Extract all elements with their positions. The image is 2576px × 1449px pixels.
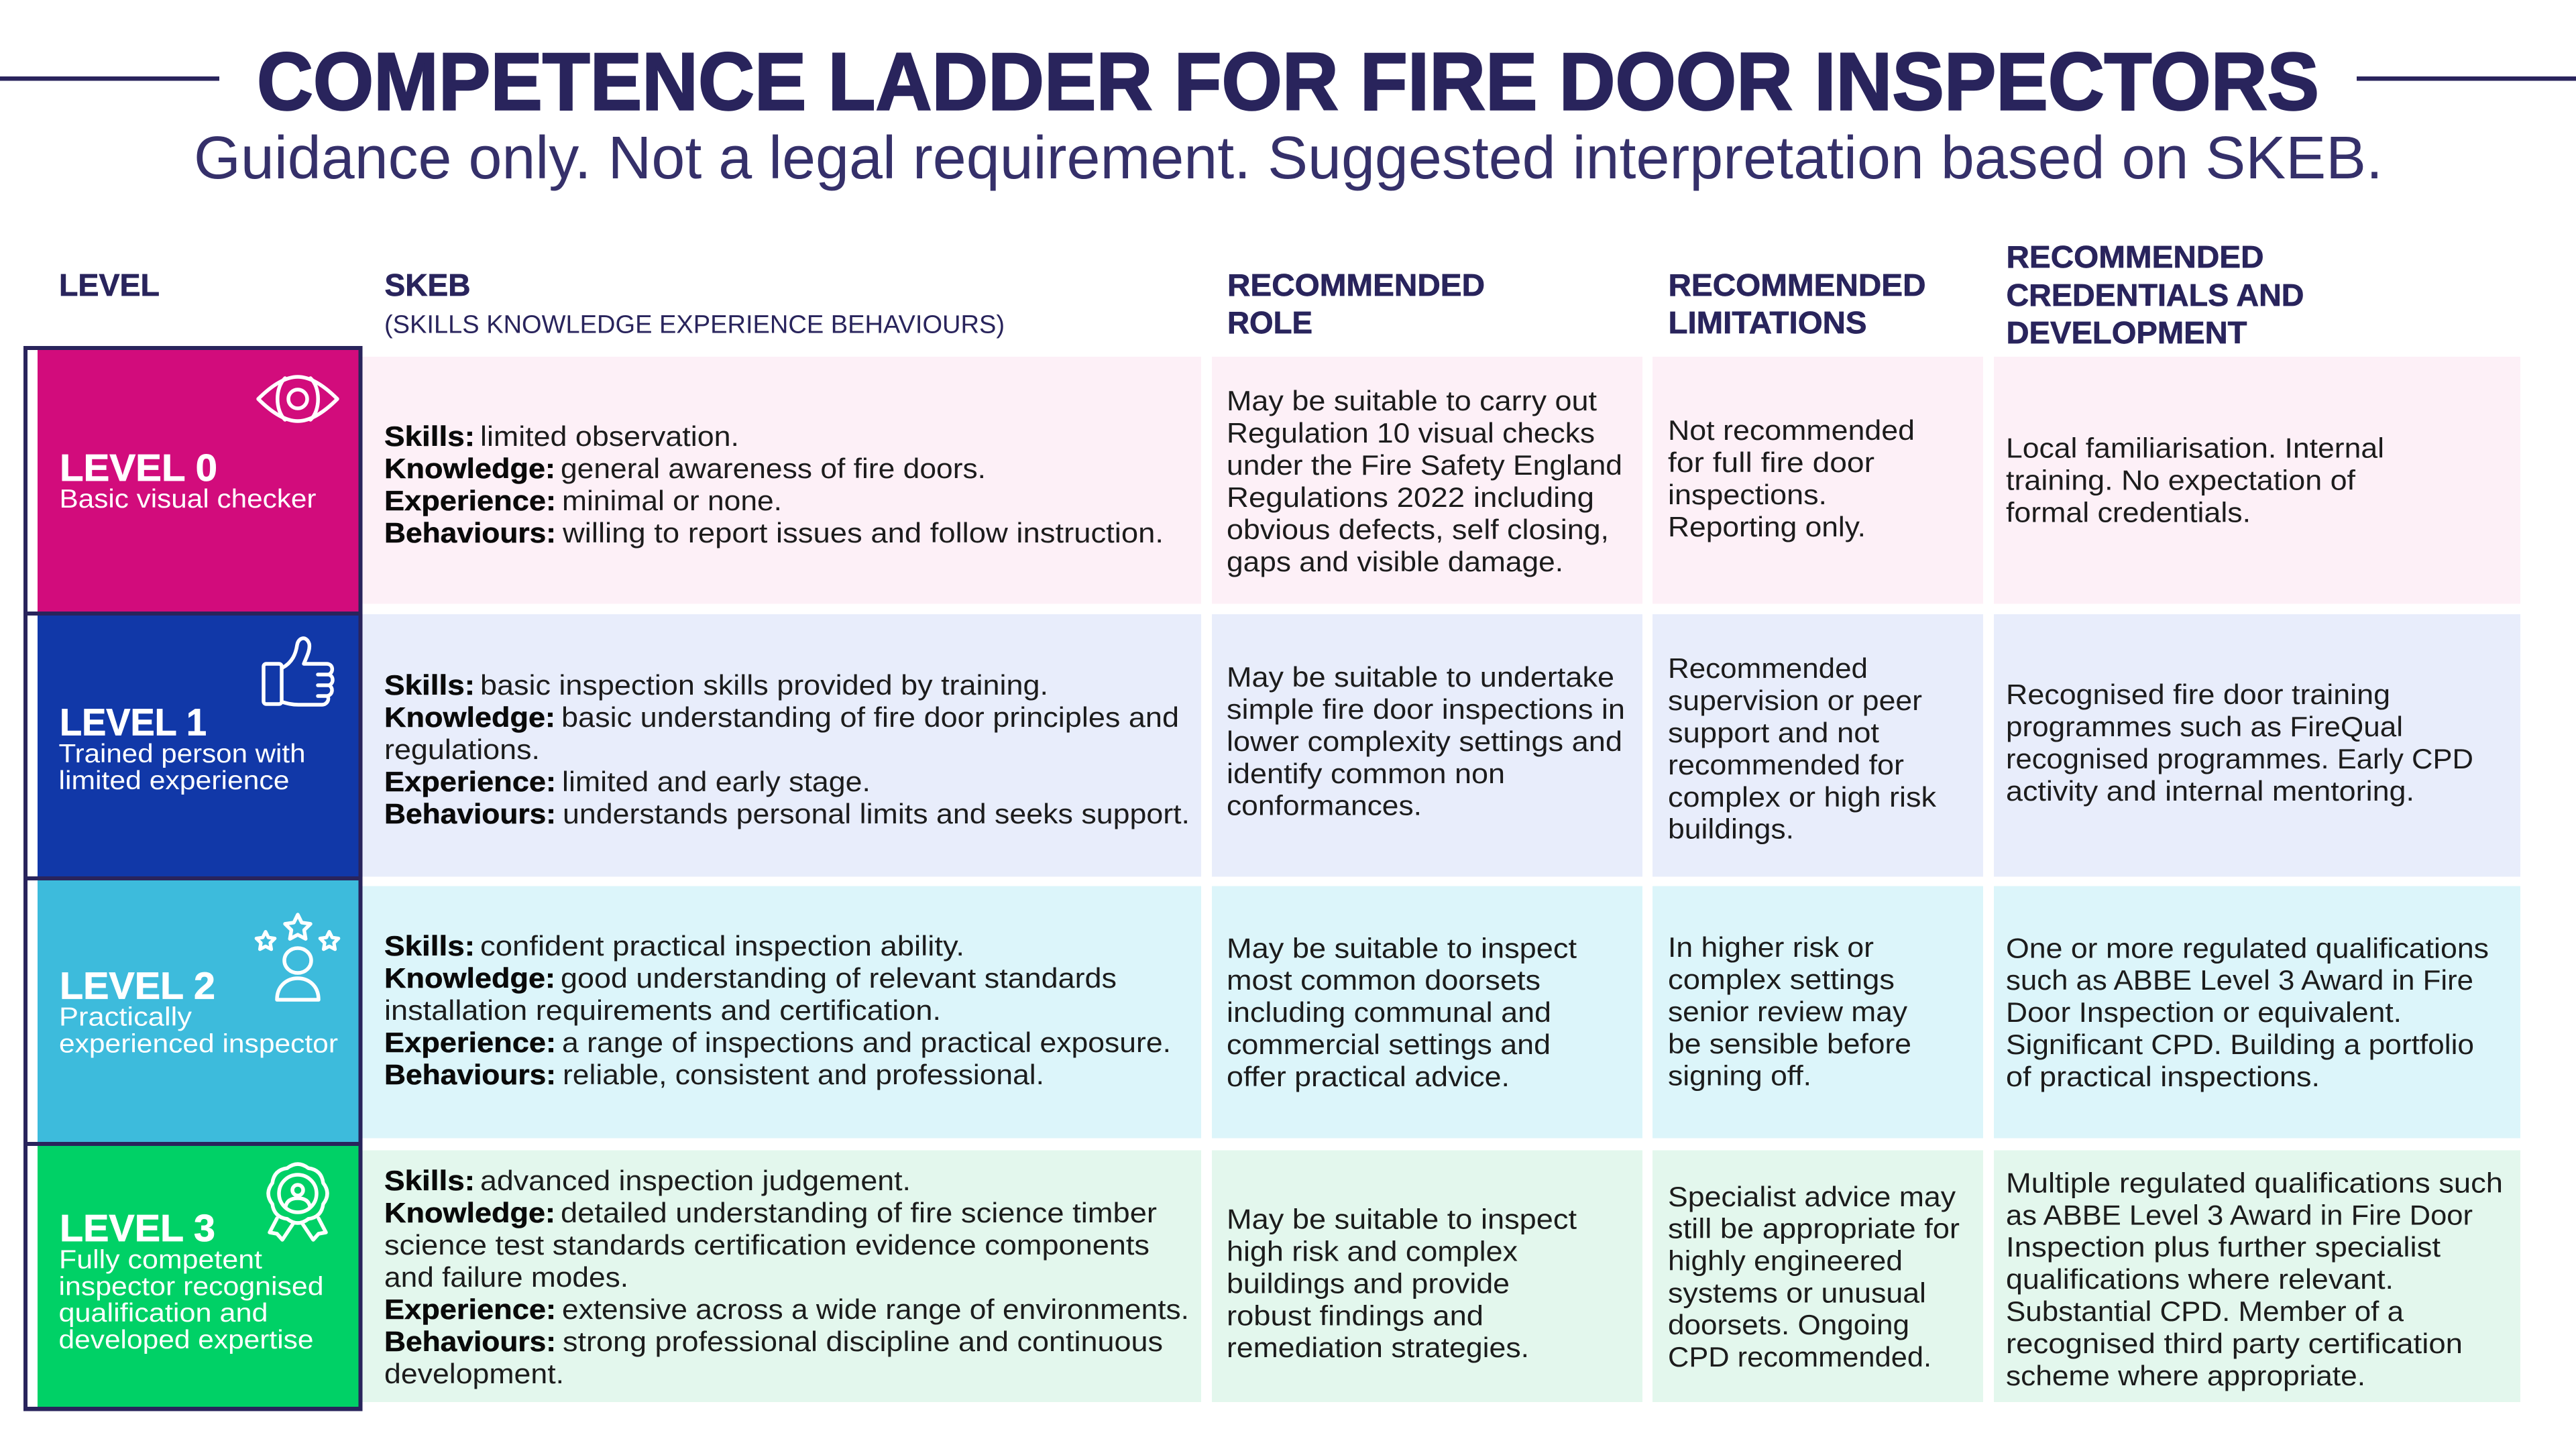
row 3: credentials: recognised third party certification: [2006, 1328, 2463, 1359]
row 1: limitations: recommended for: [1668, 749, 1904, 780]
row 1: credentials: Recognised fire door training: [2006, 679, 2390, 710]
level 3 description: Fully competent: [59, 1246, 262, 1274]
row 2: limitations: In higher risk or: [1668, 931, 1874, 963]
row 1: credentials: activity and internal mentoring.: [2006, 775, 2414, 807]
row 0: limitations: for full fire door: [1668, 447, 1874, 478]
row 1: role: simple fire door inspections in: [1227, 693, 1625, 725]
row 3: SKEB: science test standards certification evidence components: [384, 1229, 1150, 1261]
level 2 name: LEVEL 2: [60, 964, 215, 1007]
row 2: SKEB: confident practical inspection ability.: [480, 930, 964, 962]
row 0: limitations: Not recommended: [1668, 414, 1915, 446]
row 0: role: Regulations 2022 including: [1227, 481, 1594, 513]
row 1: SKEB: Skills:: [384, 669, 475, 701]
header: recommended credentials and development: [2007, 239, 2304, 350]
row 3: limitations: systems or unusual: [1668, 1277, 1926, 1309]
icon: rosette with person: [268, 1164, 327, 1240]
column headers: [59, 239, 2304, 350]
right title rule: [2357, 76, 2576, 80]
row 0: SKEB: Behaviours:: [384, 517, 556, 548]
row 1: limitations: support and not: [1668, 717, 1879, 748]
level 2 description: Practically: [59, 1003, 192, 1031]
row 1: SKEB: Experience:: [384, 766, 556, 797]
level 1 description: Trained person with: [59, 740, 306, 768]
header: recommended credentials and development: CREDENTIALS AND: [2007, 278, 2304, 312]
row 1: credentials: [1994, 614, 2520, 877]
row 1: SKEB: Knowledge:: [384, 701, 555, 733]
row 3: SKEB: development.: [384, 1358, 564, 1389]
row 3: SKEB: [362, 1151, 1201, 1402]
row 1: credentials: recognised programmes. Early CPD: [2006, 743, 2473, 774]
row 0: role: under the Fire Safety England: [1227, 449, 1622, 481]
row 1: role: identify common non: [1227, 758, 1505, 789]
panel: level 1 badge: [38, 614, 359, 878]
row 3: limitations: [1653, 1151, 1983, 1402]
header: SKEB: SKEB: [385, 268, 471, 302]
row 0: limitations: inspections.: [1668, 479, 1827, 510]
header: recommended role: ROLE: [1227, 305, 1312, 340]
row 2: SKEB: installation requirements and certification.: [384, 994, 941, 1026]
row 3: SKEB: Knowledge:: [384, 1197, 555, 1228]
row 1: limitations: [1653, 614, 1983, 877]
row 2: credentials: One or more regulated qualifications: [2006, 932, 2489, 964]
row 3: limitations: doorsets. Ongoing: [1668, 1309, 1909, 1340]
subtitle: Guidance only. Not a legal requirement. Suggested interpretation based on SKEB.: [194, 125, 2383, 192]
row 3: role: buildings and provide: [1227, 1267, 1510, 1299]
row 1: SKEB: [362, 614, 1201, 877]
level 2 description: experienced inspector: [59, 1030, 338, 1058]
row 1: limitations: supervision or peer: [1668, 685, 1922, 716]
row 2: SKEB: [362, 886, 1201, 1139]
header: recommended credentials and development: DEVELOPMENT: [2007, 315, 2247, 350]
row 3: SKEB: Skills:: [384, 1165, 475, 1196]
header: recommended limitations: LIMITATIONS: [1669, 305, 1867, 340]
row 3: limitations: highly engineered: [1668, 1244, 1903, 1277]
row 1: SKEB: limited and early stage.: [562, 766, 871, 797]
row 1: limitations: Recommended: [1668, 652, 1868, 684]
row 3: credentials: Multiple regulated qualifications such: [2006, 1167, 2503, 1199]
row 3: credentials: qualifications where relevant.: [2006, 1263, 2394, 1295]
row 3: SKEB: detailed understanding of fire science timber: [561, 1197, 1157, 1228]
header: SKEB: (SKILLS KNOWLEDGE EXPERIENCE BEHAVIOURS): [384, 311, 1005, 339]
row 3: limitations: Specialist advice may: [1668, 1181, 1956, 1212]
row 0: SKEB: Skills:: [384, 420, 475, 452]
row 3: role: May be suitable to inspect: [1227, 1203, 1577, 1235]
row 3: limitations: CPD recommended.: [1668, 1341, 1931, 1373]
header: recommended role: RECOMMENDED: [1227, 268, 1485, 302]
row 0: role: gaps and visible damage.: [1227, 546, 1563, 577]
level 2 description: [59, 1003, 338, 1058]
row 2: credentials: of practical inspections.: [2006, 1061, 2320, 1092]
row 3: SKEB: advanced inspection judgement.: [480, 1165, 911, 1196]
row 1: credentials: programmes such as FireQual: [2006, 711, 2403, 742]
panel: level 2 badge: [38, 878, 359, 1143]
row 1: SKEB: regulations.: [384, 734, 540, 765]
row 1: role: May be suitable to undertake: [1227, 661, 1614, 693]
row 2: SKEB: Behaviours:: [384, 1059, 556, 1090]
row 0: SKEB: willing to report issues and follow instruction.: [562, 517, 1164, 548]
icon: person with stars: [256, 915, 339, 1000]
row 3: SKEB: and failure modes.: [384, 1261, 628, 1293]
row 0: limitations: [1653, 357, 1983, 603]
row 1: limitations: buildings.: [1668, 813, 1794, 845]
row 3: credentials: scheme where appropriate.: [2006, 1360, 2365, 1391]
row 2: credentials: [1994, 886, 2520, 1139]
level 3 description: developed expertise: [59, 1326, 314, 1354]
row 3: SKEB: strong professional discipline and continuous: [563, 1326, 1163, 1357]
row 2: limitations: senior review may: [1668, 996, 1907, 1027]
row 3: SKEB: extensive across a wide range of environments.: [562, 1293, 1189, 1325]
row 3: credentials: as ABBE Level 3 Award in Fire Door: [2006, 1199, 2473, 1231]
header: recommended role: [1227, 268, 1485, 340]
level 3 description: inspector recognised: [59, 1273, 323, 1301]
row 0: credentials: Local familiarisation. Internal: [2006, 432, 2384, 464]
row 1: SKEB: basic inspection skills provided by training.: [480, 669, 1048, 701]
header: recommended limitations: RECOMMENDED: [1669, 268, 1926, 302]
icon: eye: [258, 377, 337, 421]
row 3: limitations: still be appropriate for: [1668, 1212, 1960, 1244]
level 0 description: Basic visual checker: [59, 485, 317, 514]
row 0: SKEB: Knowledge:: [384, 453, 555, 484]
row 1: role: [1212, 614, 1642, 877]
row 1: SKEB: understands personal limits and seeks support.: [563, 798, 1190, 829]
row 1: limitations: complex or high risk: [1668, 781, 1937, 813]
level 1 name: LEVEL 1: [60, 701, 207, 744]
level 1 description: [59, 740, 306, 795]
row 2: limitations: complex settings: [1668, 964, 1895, 995]
row 3: role: high risk and complex: [1227, 1235, 1518, 1267]
row 2: limitations: [1653, 886, 1983, 1139]
row 3: SKEB: Behaviours:: [384, 1326, 556, 1357]
row 2: SKEB: reliable, consistent and professional.: [563, 1059, 1044, 1090]
row 2: SKEB: Experience:: [384, 1027, 556, 1058]
row 3: role: robust findings and: [1227, 1299, 1483, 1332]
row 3: credentials: Substantial CPD. Member of a: [2006, 1295, 2404, 1327]
row 0: limitations: Reporting only.: [1668, 511, 1866, 542]
row 2: SKEB: Knowledge:: [384, 962, 555, 994]
row 0: SKEB: Experience:: [384, 485, 556, 516]
row 0: SKEB: minimal or none.: [562, 485, 782, 516]
row 2: role: [1212, 886, 1642, 1139]
row 2: SKEB: a range of inspections and practical exposure.: [562, 1027, 1171, 1058]
row 0: role: Regulation 10 visual checks: [1227, 417, 1595, 449]
row 1: role: lower complexity settings and: [1227, 726, 1622, 757]
row 3: role: remediation strategies.: [1227, 1332, 1529, 1363]
row 2: role: commercial settings and: [1227, 1029, 1551, 1060]
row 3: role: [1212, 1151, 1642, 1402]
row 0: SKEB: limited observation.: [480, 420, 739, 452]
left title rule: [0, 76, 219, 80]
row 3: SKEB: Experience:: [384, 1293, 556, 1325]
ladder frame: [23, 346, 362, 1411]
row 0: SKEB: general awareness of fire doors.: [561, 453, 986, 484]
level 3 name: LEVEL 3: [60, 1207, 215, 1250]
row 0: credentials: training. No expectation of: [2006, 464, 2355, 496]
row 2: limitations: be sensible before: [1668, 1028, 1911, 1059]
level 3 description: qualification and: [59, 1299, 268, 1328]
header: level: LEVEL: [59, 268, 160, 302]
row 1: SKEB: Behaviours:: [384, 798, 556, 829]
icon: thumbs up: [264, 638, 333, 705]
row 2: credentials: such as ABBE Level 3 Award in Fire: [2006, 964, 2473, 996]
row 0: role: May be suitable to carry out: [1227, 385, 1597, 416]
row 0: role: [1212, 357, 1642, 603]
row 2: SKEB: Skills:: [384, 930, 475, 962]
row 2: role: most common doorsets: [1227, 964, 1541, 996]
header: SKEB: [384, 268, 1005, 339]
row 0: credentials: formal credentials.: [2006, 496, 2251, 528]
title block: [0, 36, 2576, 192]
row 0: SKEB: [362, 357, 1201, 603]
row 0: role: obvious defects, self closing,: [1227, 514, 1609, 545]
panel: level 3 badge: [38, 1143, 359, 1408]
header: recommended credentials and development: RECOMMENDED: [2007, 239, 2264, 274]
row 2: role: May be suitable to inspect: [1227, 932, 1577, 964]
panel: level 0 badge: [38, 349, 359, 613]
row 2: role: including communal and: [1227, 996, 1551, 1028]
row 3: credentials: Inspection plus further specialist: [2006, 1231, 2441, 1263]
header: recommended limitations: [1669, 268, 1926, 340]
row 1: role: conformances.: [1227, 790, 1422, 821]
row 3: credentials: [1994, 1151, 2520, 1402]
title: COMPETENCE LADDER FOR FIRE DOOR INSPECTORS: [257, 36, 2319, 127]
row 2: role: offer practical advice.: [1227, 1061, 1510, 1092]
row 2: credentials: Significant CPD. Building a portfolio: [2006, 1029, 2474, 1060]
level 3 description: [59, 1246, 323, 1354]
row 2: credentials: Door Inspection or equivalent.: [2006, 996, 2402, 1028]
level 1 description: limited experience: [59, 766, 290, 795]
row 2: SKEB: good understanding of relevant standards: [561, 962, 1117, 994]
level 0 name: LEVEL 0: [60, 447, 217, 489]
row 0: credentials: [1994, 357, 2520, 603]
row 1: SKEB: basic understanding of fire door principles and: [561, 701, 1179, 733]
row 2: limitations: signing off.: [1668, 1059, 1811, 1092]
